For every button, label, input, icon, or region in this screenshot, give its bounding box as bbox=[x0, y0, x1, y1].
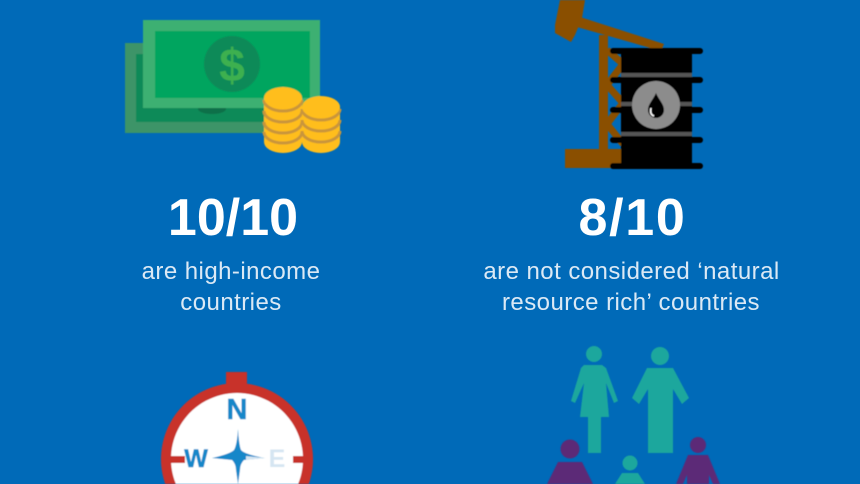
icon: compass bbox=[161, 372, 313, 484]
text: natural resource caption: resource rich’ countries bbox=[502, 289, 760, 316]
icon: purple adult right bbox=[676, 437, 720, 484]
icon: woman bbox=[571, 346, 618, 453]
text: natural resource caption: are not considered ‘natural bbox=[483, 258, 780, 285]
icon: compass: N bbox=[227, 394, 247, 426]
text: high-income caption: countries bbox=[180, 289, 282, 316]
icon: family of people bbox=[547, 346, 720, 484]
icon: man bbox=[632, 347, 689, 453]
stat: 10/10: 10/10 bbox=[168, 189, 298, 247]
text: high-income caption: are high-income bbox=[142, 258, 320, 285]
icon: compass: E bbox=[269, 445, 285, 473]
icon: oil pump and barrel bbox=[555, 0, 703, 169]
stat: 8/10: 8/10 bbox=[578, 189, 687, 247]
icon: compass: W bbox=[184, 445, 208, 473]
icon: purple adult left bbox=[547, 440, 593, 484]
icon: banknotes and coins bbox=[125, 20, 340, 153]
icon: banknotes and coins: $ bbox=[219, 39, 245, 91]
icon: child bbox=[615, 456, 645, 484]
